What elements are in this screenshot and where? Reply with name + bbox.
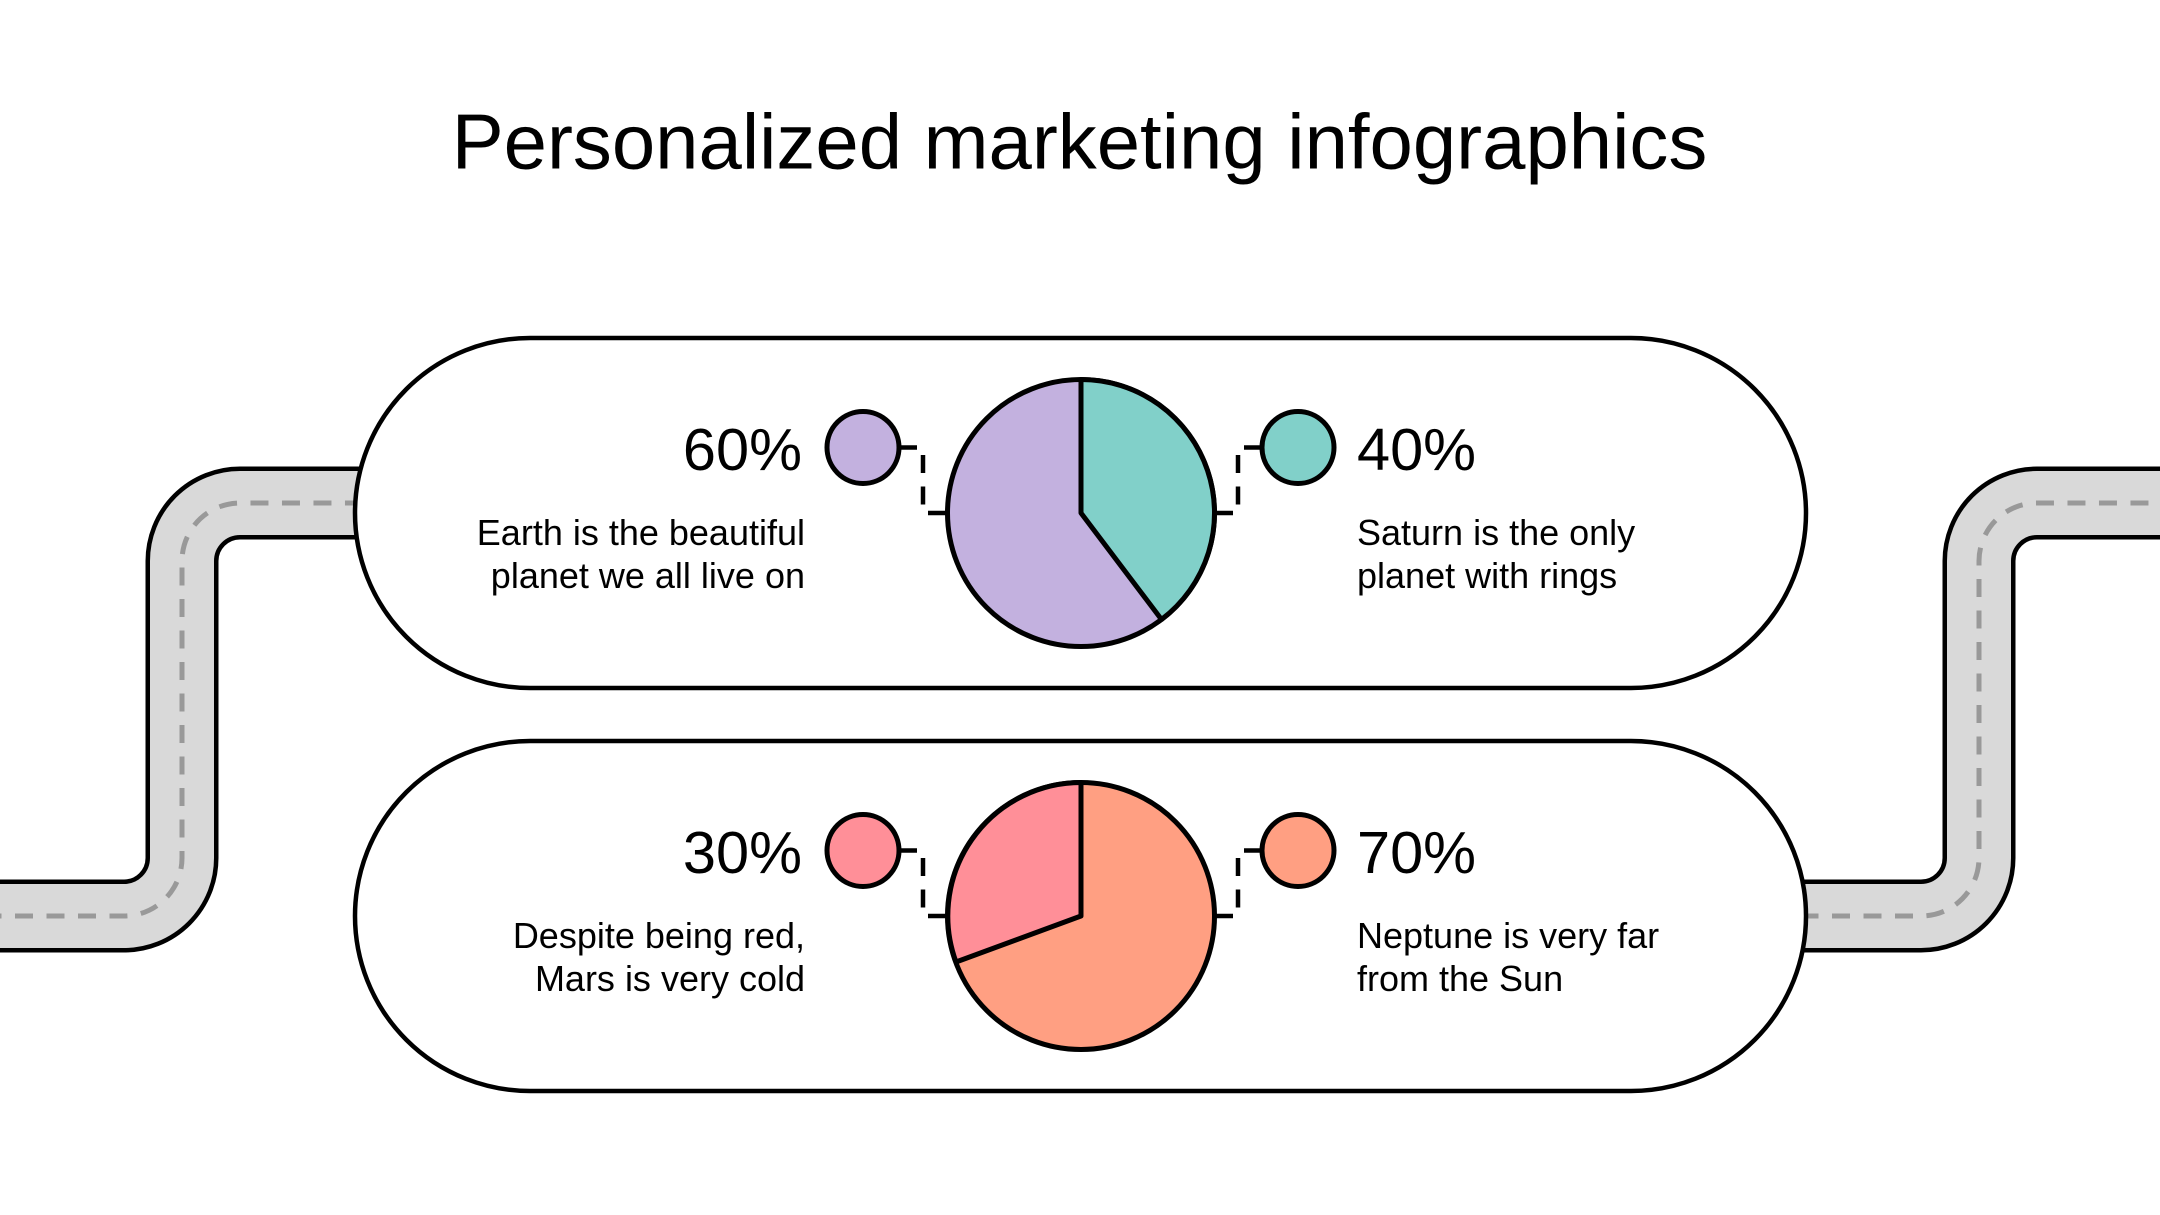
text: Neptune: from the Sun bbox=[1357, 958, 1563, 999]
text: Mars: Despite being red, bbox=[513, 915, 805, 956]
stat: 70%: 70% bbox=[1357, 819, 1476, 886]
text: Saturn: Saturn is the only bbox=[1357, 512, 1635, 553]
panel: bottom pill bbox=[355, 741, 1806, 1091]
title: Personalized marketing infographics bbox=[452, 98, 1707, 186]
legend dot: purple bbox=[827, 412, 899, 484]
stat: 40%: 40% bbox=[1357, 416, 1476, 483]
text: Saturn: planet with rings bbox=[1357, 555, 1617, 596]
legend dot: red bbox=[827, 814, 899, 886]
road: left bbox=[0, 503, 400, 916]
pie chart: 30 / 70 bbox=[948, 782, 1214, 1050]
stat: 30%: 30% bbox=[683, 819, 802, 886]
connector: 40% bbox=[1214, 448, 1262, 513]
connector: 30% bbox=[899, 850, 947, 916]
legend dot: teal bbox=[1262, 412, 1334, 484]
pie chart: 60 / 40 bbox=[948, 380, 1215, 646]
text: Earth: planet we all live on bbox=[491, 555, 805, 596]
text: Neptune: Neptune is very far bbox=[1357, 915, 1659, 956]
panel: top pill bbox=[355, 338, 1806, 688]
text: Earth: Earth is the beautiful bbox=[477, 512, 805, 553]
stat: 60%: 60% bbox=[683, 416, 802, 483]
legend dot: orange bbox=[1262, 814, 1334, 886]
road: right bbox=[1674, 503, 2160, 916]
connector: 70% bbox=[1214, 850, 1262, 916]
text: Mars: Mars is very cold bbox=[535, 958, 805, 999]
connector: 60% bbox=[899, 448, 947, 513]
